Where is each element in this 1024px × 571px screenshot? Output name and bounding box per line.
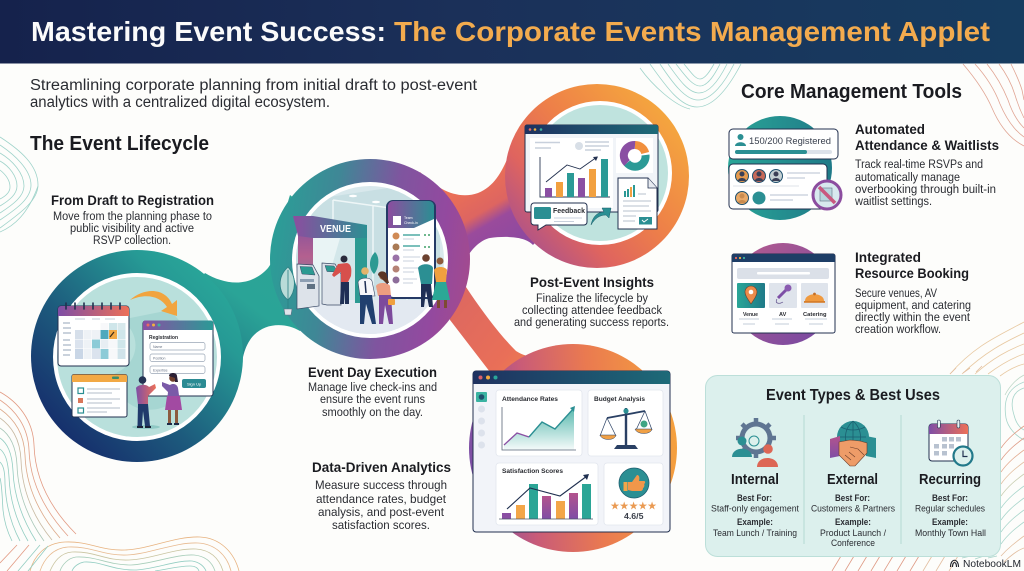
text block: integrated resource booking: Integrated <box>855 250 921 265</box>
person: organizer <box>162 373 182 425</box>
text block: automated attendance and waitlists: Track real-time RSVPs and <box>855 157 983 171</box>
text block: automated attendance and waitlists: Automated <box>855 122 925 137</box>
text block: post-event insights <box>514 274 669 329</box>
text block: integrated resource booking: directly within the event <box>855 310 971 324</box>
ribbon ring 3 <box>505 84 689 268</box>
icon: registration form: Expertise <box>153 368 168 372</box>
attendee list <box>729 164 827 209</box>
chart: satisfaction scores: Satisfaction Scores <box>502 468 563 475</box>
icon: globe with handshake <box>830 421 876 466</box>
phone: Check-in <box>404 221 418 225</box>
sidebar <box>476 392 487 448</box>
rating card <box>604 463 663 525</box>
venue gate <box>293 216 367 304</box>
person: couple by phone <box>418 254 450 308</box>
column: external: External <box>827 471 878 488</box>
column: external: Product Launch / <box>820 528 886 539</box>
column: recurring: Example: <box>932 517 968 528</box>
text block: from draft to registration: public visibility and active <box>70 221 194 235</box>
insights dashboard window <box>525 125 658 212</box>
rating stars: ★★★★★ <box>610 500 657 512</box>
illustration: event day venue <box>280 180 450 340</box>
column: recurring <box>915 420 986 539</box>
person: guests walking <box>358 267 395 324</box>
text block: event day execution: smoothly on the day. <box>322 405 423 419</box>
check-in kiosks <box>297 263 341 309</box>
chart: satisfaction scores <box>496 463 598 525</box>
chart: budget analysis scale: Budget Analysis <box>594 396 645 403</box>
text block: from draft to registration: From Draft to Registration <box>51 192 214 208</box>
text block: data-driven analytics: analysis, and post-event <box>318 505 445 519</box>
title white part: Mastering Event Success: <box>31 16 386 47</box>
text block: event day execution: Event Day Execution <box>308 364 437 380</box>
illustration: post-event insights <box>525 101 672 245</box>
text block: from draft to registration <box>51 192 214 247</box>
text block: post-event insights: Post-Event Insights <box>530 274 654 290</box>
text block: post-event insights: and generating success reports. <box>514 315 669 329</box>
text block: integrated resource booking: creation workflow. <box>855 322 941 336</box>
column: external: Conference <box>831 538 875 549</box>
registration counter: 150/200 Registered <box>749 136 831 146</box>
rating value: 4.6/5 <box>624 512 644 521</box>
chart: attendance rates <box>496 390 582 456</box>
plant left <box>280 267 294 315</box>
phone <box>387 201 435 298</box>
icon: checklist <box>72 374 127 417</box>
text block: event day execution: Manage live check-ins and <box>308 380 437 394</box>
venue tile: Venue <box>743 312 758 318</box>
section heading: core management tools: Core Management Tools <box>741 81 962 103</box>
text block: automated attendance and waitlists: Attendance & Waitlists <box>855 138 999 153</box>
column: external: Example: <box>835 517 871 528</box>
catering tile: Catering <box>803 312 826 318</box>
icon: registration form: Sign Up <box>187 382 202 386</box>
intro text: Streamlining corporate planning from initial draft to post-event <box>30 77 478 94</box>
intro text <box>30 77 478 111</box>
ribbon ring 2 <box>270 159 470 359</box>
icon: registration form <box>143 320 213 396</box>
text block: from draft to registration: RSVP collection. <box>93 233 171 247</box>
tool icon: attendance and waitlists <box>728 116 841 220</box>
text block: data-driven analytics <box>312 459 451 532</box>
icon: thumbs up <box>628 475 645 491</box>
column: internal: Best For: <box>737 493 772 504</box>
person at kiosk <box>332 256 351 304</box>
analytics dashboard window <box>473 371 670 532</box>
column: external: Best For: <box>835 493 870 504</box>
illustration: draft to registration <box>53 273 221 441</box>
text block: data-driven analytics: Data-Driven Analytics <box>312 459 451 475</box>
column: recurring: Best For: <box>932 493 968 504</box>
tool icon: resource booking <box>732 243 835 345</box>
text block: data-driven analytics: Measure success through <box>315 478 447 492</box>
icon: gear with people <box>732 418 778 467</box>
notebooklm mark: NotebookLM <box>963 558 1021 570</box>
av tile: AV <box>779 312 787 318</box>
icon: report document <box>618 178 657 229</box>
column: internal: Example: <box>737 517 773 528</box>
text block: post-event insights: Finalize the lifecycle by <box>536 291 649 305</box>
icon: registration form: Registration <box>149 335 179 341</box>
text block: data-driven analytics: attendance rates, budget <box>316 492 447 506</box>
arrow: teal <box>591 208 611 225</box>
column: internal <box>711 418 799 539</box>
icon: calendar with clock <box>929 420 972 466</box>
icon: calendar <box>58 303 129 366</box>
text block: integrated resource booking: Resource Booking <box>855 266 969 281</box>
ribbon band: event day to analytics <box>440 275 573 448</box>
text block: integrated resource booking: Secure venues, AV <box>855 286 938 300</box>
text block: automated attendance and waitlists: waitlist settings. <box>854 194 932 208</box>
text block: automated attendance and waitlists <box>854 122 999 208</box>
lifecycle ribbon <box>31 84 689 552</box>
chart: attendance rates: Attendance Rates <box>502 396 558 403</box>
title orange part: The Corporate Events Management Applet <box>394 16 990 47</box>
text block: integrated resource booking <box>855 250 971 336</box>
column: external: Customers & Partners <box>811 504 895 514</box>
text block: post-event insights: collecting attendee feedback <box>522 303 663 317</box>
venue gate: VENUE <box>320 224 351 235</box>
column: internal: Internal <box>731 471 779 488</box>
chart: budget analysis scale <box>588 390 663 456</box>
icon: registration form: Name <box>153 345 162 349</box>
phone: Team <box>404 216 413 220</box>
ribbon band: draft to event day <box>137 195 370 395</box>
ribbon ring 1 <box>31 250 243 462</box>
donut chart <box>624 145 646 167</box>
column: recurring: Regular schedules <box>915 504 985 514</box>
column: internal: Staff-only engagement <box>711 504 799 514</box>
icon: registration form: Position <box>153 356 166 360</box>
column: recurring: Monthly Town Hall <box>915 528 986 539</box>
column: internal: Team Lunch / Training <box>713 528 797 539</box>
panel: event types and best uses <box>706 376 1000 556</box>
section heading: the event lifecycle: The Event Lifecycle <box>30 133 209 155</box>
inner plant <box>370 252 378 274</box>
text block: automated attendance and waitlists: automatically manage <box>855 170 960 184</box>
text block: event day execution <box>308 364 437 419</box>
column: external <box>811 421 895 549</box>
text block: from draft to registration: Move from the planning phase to <box>53 209 212 223</box>
header band <box>0 0 1024 64</box>
panel heading: Event Types & Best Uses <box>766 387 940 404</box>
ribbon ring 4 <box>469 344 677 552</box>
column: recurring: Recurring <box>919 471 981 488</box>
text block: integrated resource booking: equipment, and catering <box>855 298 971 312</box>
icon: waitlist blocked <box>813 181 841 209</box>
callout: feedback: Feedback <box>553 206 585 215</box>
arrow: draft to registration <box>130 291 177 316</box>
person: attendee <box>132 376 160 429</box>
text block: automated attendance and waitlists: overbooking through built-in <box>855 182 996 196</box>
intro text: analytics with a centralized digital ecosystem. <box>30 94 330 111</box>
ribbon band: event day to insights <box>370 140 597 277</box>
text block: event day execution: ensure the event runs <box>320 392 425 406</box>
text block: data-driven analytics: satisfaction scores. <box>332 518 430 532</box>
callout: feedback <box>531 203 587 230</box>
